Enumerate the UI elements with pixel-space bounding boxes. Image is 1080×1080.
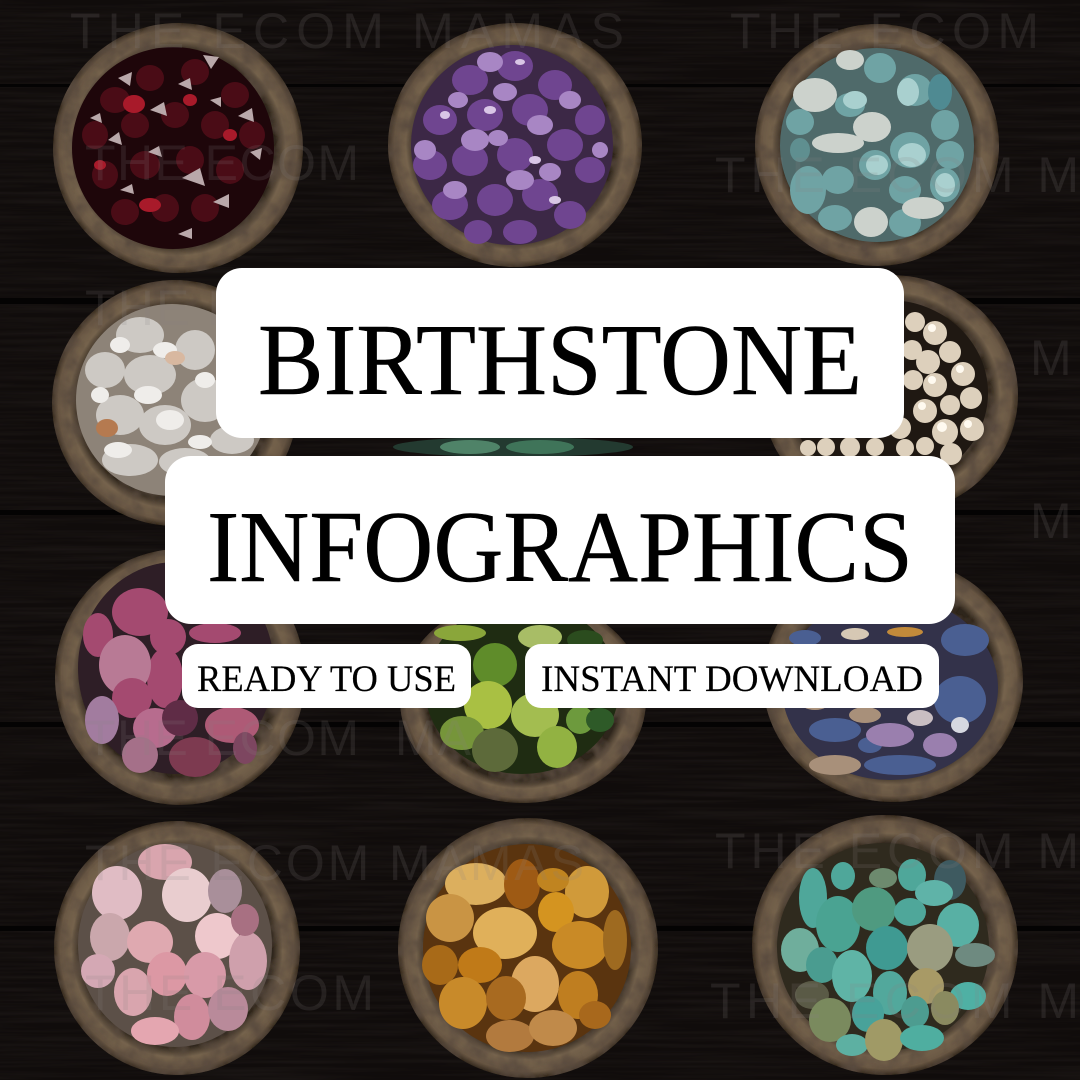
watermarks: THE ECOM MAMAS: THE ECOM MAMAS — [70, 3, 625, 59]
watermarks: THE ECOM MAMAS: THE ECOM MAMAS — [85, 835, 585, 891]
watermarks: THE ECOM MAMAS: THE ECOM — [85, 965, 375, 1021]
bowl: white quartz — [52, 280, 298, 526]
bowl: citrine — [398, 818, 658, 1078]
bowl: garnet — [53, 23, 303, 273]
watermarks: THE ECOM MAMAS: M — [1030, 330, 1073, 386]
watermarks: THE ECOM MAMAS: M — [1030, 493, 1073, 549]
banner: INFOGRAPHICS: INFOGRAPHICS — [207, 491, 913, 604]
watermarks: THE ECOM MAMAS: THE ECOM — [85, 280, 365, 336]
watermarks: THE ECOM MAMAS: THE ECOM — [730, 3, 1040, 59]
banner: BIRTHSTONE: BIRTHSTONE — [258, 304, 862, 417]
banner: BIRTHSTONE — [216, 268, 904, 438]
badge: instant download — [525, 644, 939, 708]
watermarks: THE ECOM MAMAS: THE ECOM M — [715, 147, 1080, 203]
bowl: peridot — [400, 597, 646, 803]
watermarks: THE ECOM MAMAS: THE ECOM — [85, 135, 360, 191]
badge: ready to use: READY TO USE — [197, 659, 456, 700]
bowl: pearls — [762, 275, 1018, 515]
bowl: amethyst — [388, 23, 642, 267]
bowl: rose quartz — [54, 821, 300, 1075]
bowl: emerald — [393, 437, 633, 457]
banner: INFOGRAPHICS — [165, 456, 955, 624]
watermarks: THE ECOM MAMAS: THE ECOM M — [710, 973, 1080, 1029]
watermarks: THE ECOM MAMAS: MA — [395, 710, 472, 766]
badge: instant download: INSTANT DOWNLOAD — [541, 659, 923, 700]
watermarks: THE ECOM MAMAS: THE ECOM — [85, 710, 360, 766]
bowl: mixed gemstones — [763, 558, 1023, 802]
bowl: aquamarine — [755, 24, 999, 266]
watermarks: THE ECOM MAMAS: THE ECOM M — [715, 823, 1080, 879]
bowl: turquoise — [752, 815, 1018, 1075]
badge: ready to use — [182, 644, 471, 708]
bowl: pink tourmaline — [55, 549, 305, 805]
